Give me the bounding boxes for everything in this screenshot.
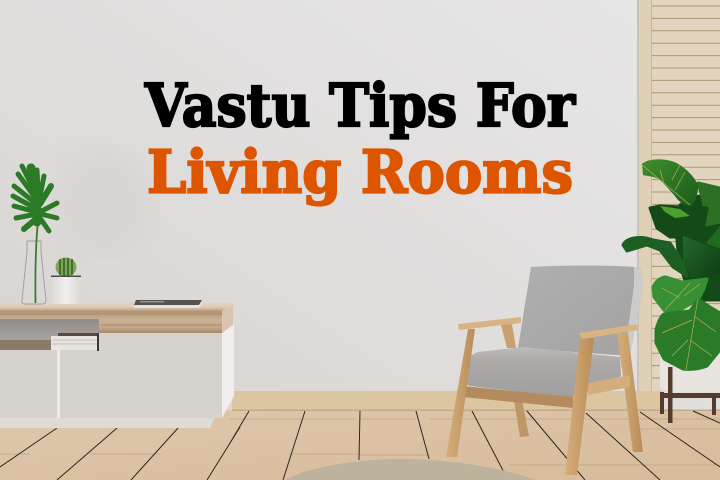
stem — [35, 222, 38, 303]
rear left arm post — [501, 324, 516, 348]
wooden edge side — [222, 304, 233, 333]
title line 2: Living Rooms — [147, 138, 573, 206]
backrest cushion — [518, 266, 643, 356]
plant stand — [660, 367, 720, 423]
right lobes — [37, 170, 38, 192]
rug — [285, 459, 535, 480]
shelf board — [0, 340, 52, 350]
door gap — [57, 350, 60, 418]
leaf veins — [641, 164, 716, 370]
wooden front edge — [0, 311, 222, 333]
monstera leaf — [13, 166, 57, 231]
front rail — [463, 386, 573, 408]
louvered wooden shutter panel — [637, 0, 720, 392]
rear right leg — [617, 333, 643, 452]
leaf body — [31, 168, 37, 222]
left armrest — [458, 317, 521, 330]
glass vase with monstera leaf — [13, 166, 57, 304]
cactus — [56, 258, 76, 276]
rear left leg — [514, 400, 529, 437]
front left leg — [446, 329, 475, 457]
seat cushion — [462, 347, 621, 397]
title line 1: Vastu Tips For — [144, 71, 576, 140]
side rail — [588, 375, 630, 395]
book on cabinet — [134, 300, 202, 308]
leaf upper right — [698, 183, 720, 225]
baseboard — [232, 391, 662, 410]
cabinet front doors — [0, 333, 222, 418]
cactus in white pot — [51, 258, 81, 304]
leaf medium lower — [653, 277, 707, 312]
cabinet side panel — [222, 324, 234, 418]
leaf top large — [642, 159, 698, 207]
cabinet shadow and plinth — [0, 417, 215, 428]
leaf left long — [623, 238, 687, 276]
leaf middle bright — [660, 206, 690, 218]
open shelf — [0, 319, 99, 350]
media cabinet — [0, 303, 234, 428]
white plant pot — [660, 340, 720, 392]
front right leg — [565, 338, 594, 475]
white pot — [51, 276, 81, 304]
vase — [22, 241, 46, 304]
stacked white books — [51, 333, 99, 351]
dark foliage behind — [677, 196, 720, 300]
leaf far right — [708, 228, 720, 247]
armchair — [446, 266, 643, 475]
fiddle leaf fig plant — [623, 159, 720, 370]
title — [144, 71, 576, 206]
leaf middle — [650, 206, 707, 237]
leaf center dark — [683, 236, 720, 278]
wooden floor — [0, 410, 720, 480]
leaf big bottom — [656, 299, 720, 369]
wooden top surface — [0, 303, 233, 311]
left lobes — [22, 166, 34, 190]
right armrest — [579, 324, 638, 339]
backrest side — [625, 267, 643, 356]
